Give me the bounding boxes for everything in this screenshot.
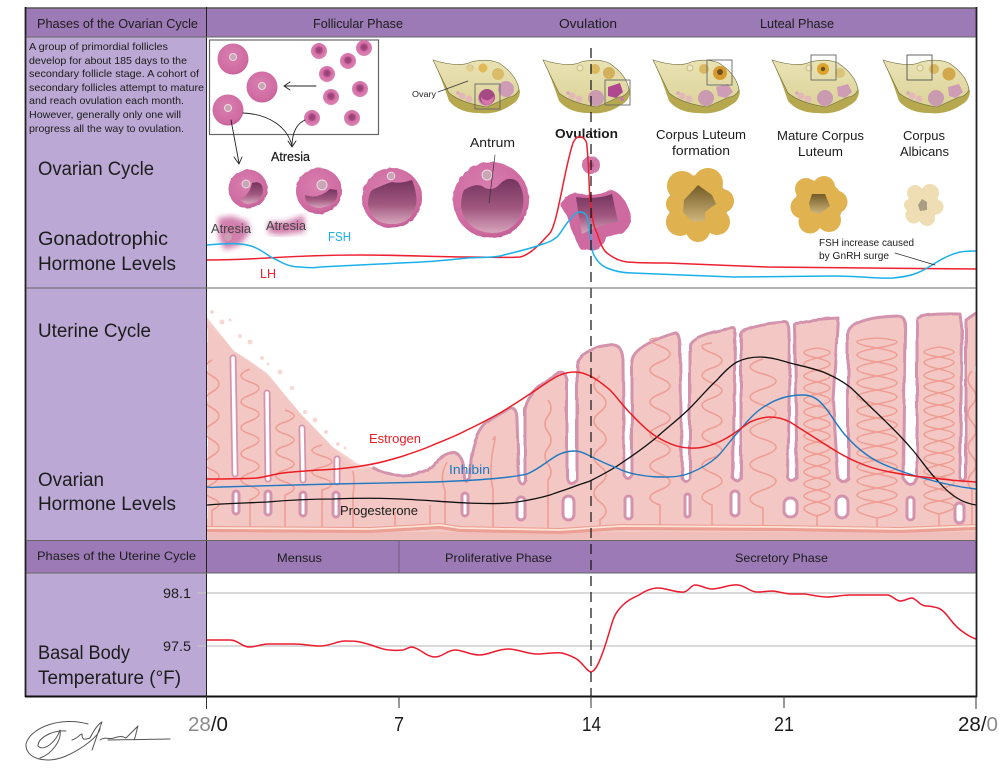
panel: ovarian cycle and gonadotrophic hormones: [207, 40, 976, 281]
heading: basal body temperature: Basal Body: [38, 643, 130, 664]
corpus luteum: mature: [790, 176, 848, 234]
atretic follicles: [211, 215, 306, 250]
phase: proliferative: Proliferative Phase: [445, 551, 552, 565]
phase: luteal: Luteal Phase: [760, 17, 834, 31]
label: corpus albicans: Corpus: [903, 129, 945, 143]
heading: gonadotrophic hormone levels: Gonadotrophic: [38, 229, 168, 250]
shedding edge: [200, 305, 365, 465]
basal layer: [207, 525, 976, 540]
heading: basal body temperature: Temperature (°F): [38, 668, 181, 689]
day axis: [188, 696, 998, 736]
estrogen curve: [207, 372, 976, 482]
heading: phases of the ovarian cycle: Phases of the Ovarian Cycle: [37, 17, 198, 31]
label: corpus luteum formation: formation: [672, 144, 730, 158]
day label 14: 14: [582, 714, 601, 736]
heading: ovarian cycle: Ovarian Cycle: [38, 159, 154, 180]
label: mature corpus luteum: [777, 129, 864, 159]
intro paragraph: progress all the way to ovulation.: [29, 123, 184, 135]
label: mature corpus luteum: Luteum: [798, 145, 843, 159]
heading: gonadotrophic hormone levels: [38, 229, 176, 275]
atretic follicles: Atresia: [266, 219, 306, 233]
label: ovulation: Ovulation: [555, 127, 618, 141]
callout: FSH increase: by GnRH surge: [819, 250, 889, 262]
follicle: early antral: [228, 170, 268, 208]
label: atresia: Atresia: [271, 150, 310, 164]
label: antrum: Antrum: [470, 136, 515, 150]
day label 21: 21: [774, 714, 794, 736]
label: mature corpus luteum: Mature Corpus: [777, 129, 864, 143]
follicle: large antral: [362, 168, 422, 228]
intro paragraph: However, generally only one will: [29, 109, 181, 121]
callout: FSH increase: FSH increase caused: [819, 237, 914, 249]
label: corpus luteum formation: [656, 128, 746, 158]
label: inhibin: Inhibin: [449, 463, 490, 477]
intro paragraph: and reach ovulation each month.: [29, 95, 184, 107]
heading: ovarian hormone levels: [38, 470, 176, 515]
phase: secretory: Secretory Phase: [735, 551, 828, 565]
endometrial tissue: [207, 313, 976, 540]
LH curve: [207, 137, 976, 269]
phase: follicular: Follicular Phase: [313, 17, 403, 31]
FSH curve: [207, 212, 976, 278]
label: corpus albicans: Albicans: [900, 145, 949, 159]
uterine glands: lower cavities: [233, 491, 964, 523]
atresia arrows: [231, 113, 305, 164]
ovulation dashed line: [590, 48, 592, 696]
intro paragraph: develop for about 185 days to the: [29, 55, 187, 67]
intro paragraph: A group of primordial follicles: [29, 41, 168, 53]
follicle: antrum: [453, 155, 529, 238]
uterine glands: slits: [233, 358, 337, 482]
corpus luteum: formation: [666, 168, 734, 242]
villi outline: [373, 313, 976, 484]
day label 7: 7: [394, 714, 404, 736]
intro paragraph: secondary follicles attempt to mature: [29, 82, 204, 94]
day label 28/0 start: 28/0: [188, 714, 228, 736]
temperature curve: [207, 585, 976, 672]
label: corpus albicans: [900, 129, 949, 159]
heading: gonadotrophic hormone levels: Hormone Levels: [38, 254, 176, 275]
day label 28/0 end: 28/0: [958, 714, 998, 736]
intro paragraph: secondary follicle stage. A cohort of: [29, 68, 199, 80]
phase: ovulation: Ovulation: [559, 17, 617, 31]
ovary diagram: mature corpus luteum: [772, 55, 859, 113]
label: corpus luteum formation: Corpus Luteum: [656, 128, 746, 142]
label: progesterone: Progesterone: [340, 504, 418, 518]
signature: [26, 721, 170, 760]
left label column: [26, 37, 206, 696]
ovary diagram: follicular: [433, 60, 520, 113]
ruptured follicle and released oocyte: [563, 156, 628, 248]
top phase band: [26, 8, 976, 37]
label: ovary: Ovary: [412, 89, 437, 99]
progesterone curve: [207, 357, 976, 505]
follicle: growing antral: [296, 168, 342, 214]
intro paragraph: [29, 41, 204, 135]
spiral arteries: [205, 338, 976, 528]
heading: ovarian hormone levels: Hormone Levels: [38, 494, 176, 515]
uterine phase band: [26, 541, 976, 573]
ovary diagram: ovulation: [543, 60, 630, 113]
heading: uterine cycle: Uterine Cycle: [38, 321, 151, 342]
heading: ovarian hormone levels: Ovarian: [38, 470, 104, 491]
panel: uterine cycle endometrium: [200, 305, 976, 540]
ovary diagram: corpus luteum forming: [653, 60, 740, 113]
ovary diagram: corpus albicans: [883, 55, 970, 113]
corpus albicans: [904, 184, 944, 226]
heading: basal body temperature: [38, 643, 181, 689]
label: FSH: FSH: [328, 229, 351, 244]
label: estrogen: Estrogen: [369, 432, 421, 446]
tick label 98.1: 98.1: [163, 585, 191, 601]
atretic follicles: Atresia: [211, 222, 251, 236]
inhibin curve: [207, 395, 976, 489]
follicle recruitment inset box: [210, 40, 378, 134]
tick label 97.5: 97.5: [163, 638, 191, 654]
label: LH: LH: [260, 266, 276, 281]
heading: phases of the uterine cycle: Phases of the Uterine Cycle: [37, 549, 196, 563]
callout: FSH increase: [819, 237, 935, 265]
phase: mensus: Mensus: [277, 551, 322, 565]
panel: basal body temperature: [38, 585, 976, 689]
